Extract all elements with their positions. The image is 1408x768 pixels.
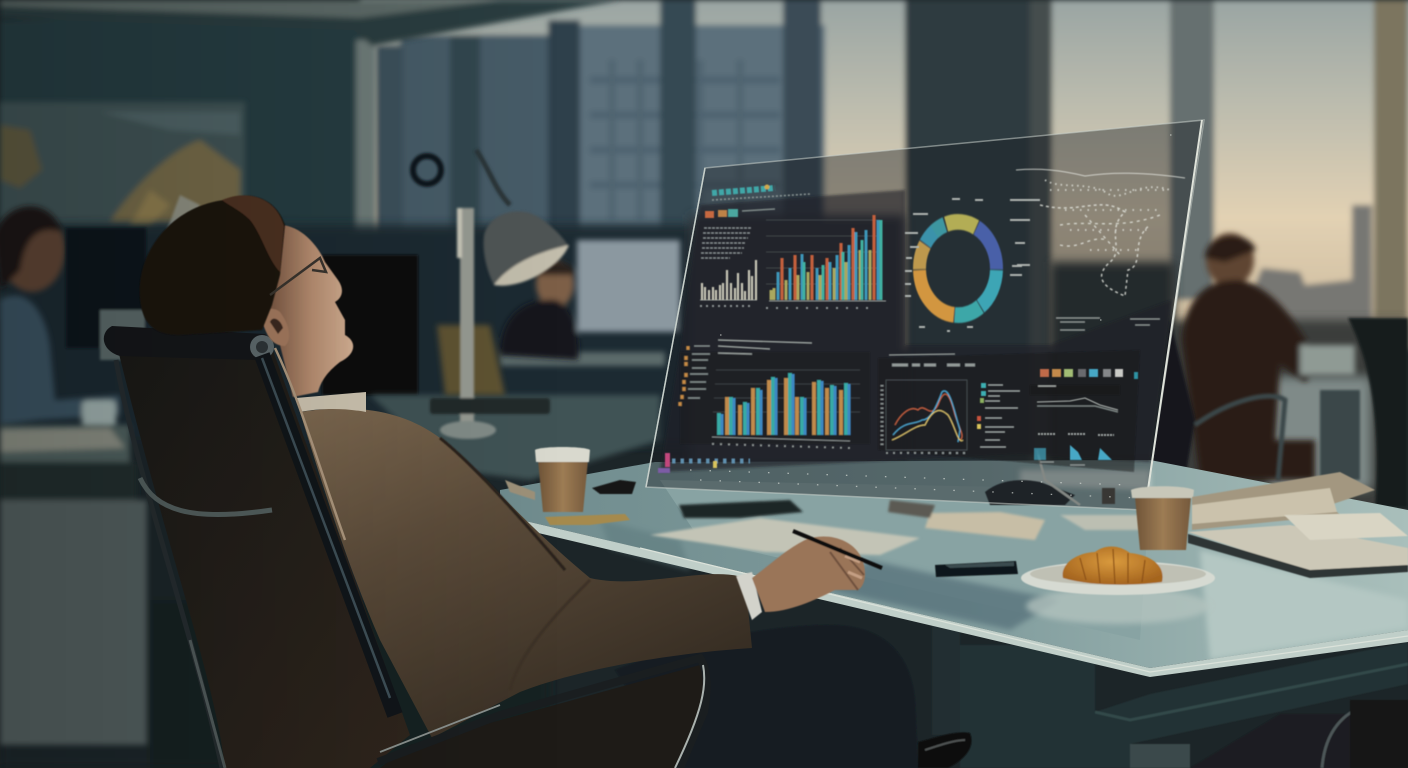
plate reflection [1026,588,1210,624]
back wall and ceiling [0,0,620,320]
table front edge [500,515,1408,677]
glass table top [500,460,1408,677]
window columns [375,0,1408,470]
glass speckles [690,135,1180,498]
left colleague at desk [0,206,120,430]
items behind the screen [650,500,1140,555]
bottom left colour legend [658,453,750,473]
office chairs at right [1150,318,1408,508]
table frame and leg [932,625,1408,768]
colleague in the middle and his monitor [437,240,680,395]
chart legend [977,383,1020,447]
desk lamp [165,150,569,439]
notebook on the right [1192,472,1375,530]
background: windows, skyline and columns [360,0,1408,470]
croissant [1063,546,1163,585]
pen [793,531,882,568]
man's glasses [270,258,326,295]
donut chart [904,203,1012,334]
grey bar chart [700,260,757,306]
left desk and cabinet [0,425,147,745]
man's trousers and shoe [615,625,972,768]
hand holding pen [736,531,882,620]
transparent dashboard screen [646,120,1204,510]
background interior lower area [0,215,1408,768]
paper stack on the right [1188,513,1408,578]
back desk surface [370,352,665,480]
dashboard header [705,184,810,218]
man's jacket and arm [300,408,752,738]
glass pane [646,120,1204,510]
plate with croissant [1021,546,1215,595]
colour swatches and sparklines [1030,369,1138,465]
man's neck and face [258,225,353,397]
lower left bar panel [680,340,870,448]
right colleague [1182,233,1355,480]
chair frame [116,348,707,768]
man's hair [140,195,285,335]
network map [1016,169,1185,330]
dark monitor behind man [66,228,418,395]
screen stand [985,450,1115,505]
chair seat under the arm [380,665,703,768]
lapel shadow [440,438,565,570]
donut labels [905,199,1040,331]
wall map [0,102,245,226]
table reflections [600,470,1408,660]
multi-colour bar chart [766,215,886,308]
chair back [118,342,410,768]
smartphone [935,561,1018,577]
left coffee cup [505,447,636,525]
reclined office chair [104,326,410,768]
lower dark band of the pane [660,190,1172,472]
distant office building [400,25,825,295]
right coffee cup [1131,486,1194,550]
city skyline [1213,205,1372,345]
lower right line-chart panel [878,350,1140,472]
chair headrest [104,326,270,360]
text lines upper left [701,228,752,258]
shirt collar [296,392,366,412]
shirt cuff [736,572,762,620]
